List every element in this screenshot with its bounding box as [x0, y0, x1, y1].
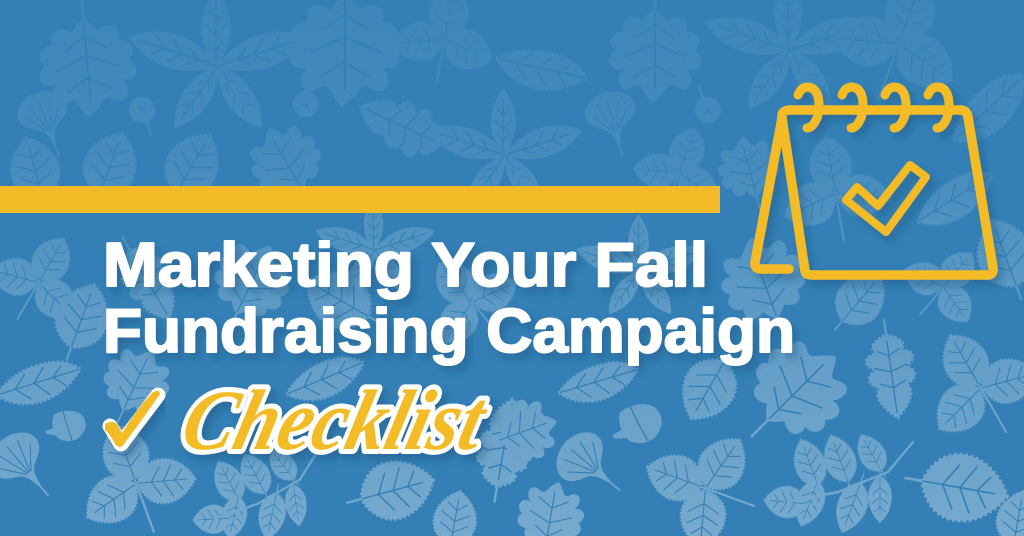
title: Fundraising Campaign — [103, 297, 795, 366]
yellow horizontal bar — [0, 186, 720, 213]
icon: calendar with checkmark — [755, 87, 993, 275]
title: Marketing Your Fall — [103, 231, 708, 300]
subtitle: Checklist: Checklist — [173, 372, 498, 468]
icon: yellow check mark with white outline — [105, 391, 160, 447]
calendar check mark — [846, 165, 926, 232]
title — [103, 231, 795, 366]
calendar spiral rings — [798, 87, 949, 128]
